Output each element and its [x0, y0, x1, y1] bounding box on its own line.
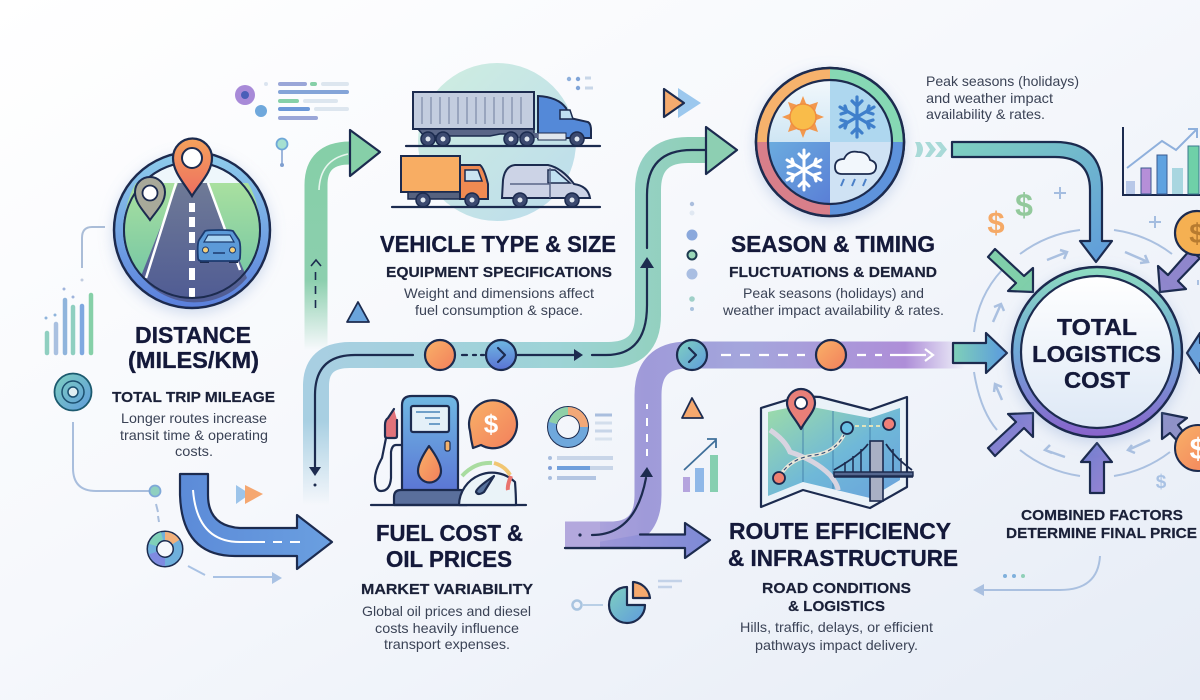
icon: white van [392, 165, 600, 207]
heading: distance: (MILES/KM) [128, 347, 259, 373]
icon: orange box truck [401, 156, 488, 207]
text: fuel description: costs heavily influence [375, 620, 519, 636]
flow: green arrow to vehicle [311, 130, 380, 352]
text: route description [740, 619, 933, 653]
icon: pie chart [572, 581, 682, 623]
icon: season badge [756, 68, 904, 216]
icon: double play top [664, 88, 701, 118]
icon: fuel-side donut and lists [548, 411, 613, 480]
panel: vehicle type [380, 63, 616, 318]
panel: distance [112, 138, 332, 569]
icon: blue triangle [347, 302, 369, 322]
icon: main pin [173, 138, 212, 196]
text: vehicle description: Weight and dimensions affect [404, 285, 594, 301]
panel: season [722, 68, 1112, 318]
subheading: road conditions: ROAD CONDITIONS [762, 580, 911, 597]
arrow: green into total [988, 249, 1033, 292]
text: distance description: Longer routes increase [121, 410, 267, 426]
icon: sun [782, 96, 824, 138]
icon: return arrow [973, 556, 1100, 596]
icon: green dollar: $ [1015, 187, 1033, 223]
icon: white snowflake [787, 150, 821, 190]
flow: teal road from distance to season [309, 127, 737, 505]
arrow: distance to fuel [180, 474, 332, 569]
arrow: season to total [915, 142, 1112, 262]
subheading: road conditions: & LOGISTICS [788, 598, 885, 615]
icon: connector bracket [82, 227, 105, 268]
subheading: total trip mileage: TOTAL TRIP MILEAGE [112, 389, 275, 406]
icon: blue snowflake [840, 97, 874, 137]
chart: left mini bars [44, 278, 91, 353]
icon: car [198, 230, 240, 263]
circle: total [1012, 267, 1182, 437]
heading: distance [128, 322, 259, 373]
heading: fuel: FUEL COST & [376, 520, 523, 546]
arrow: upper-right into total [1158, 250, 1200, 292]
subheading: fluctuations: FLUCTUATIONS & DEMAND [729, 264, 937, 281]
icon: bridge [834, 441, 913, 501]
arrow: bottom into total [1081, 443, 1112, 493]
icon: fuel pump [371, 396, 526, 505]
arrow: left into total [953, 333, 1007, 373]
heading: fuel [376, 520, 523, 572]
icon: route map [761, 389, 913, 508]
icon: dashed curve arrow [188, 566, 282, 584]
subheading: equipment: EQUIPMENT SPECIFICATIONS [386, 264, 612, 281]
heading: season: SEASON & TIMING [731, 231, 935, 257]
heading: fuel: OIL PRICES [386, 546, 512, 572]
panel: fuel [361, 396, 533, 652]
heading: total: TOTAL [1057, 314, 1137, 340]
icon: plus marks [1054, 187, 1161, 228]
text: season side note: availability & rates. [926, 106, 1045, 122]
heading: vehicle: VEHICLE TYPE & SIZE [380, 231, 616, 257]
text: season description: weather impact availability & rates. [722, 302, 944, 318]
icon: small donut [152, 536, 178, 562]
heading: total: LOGISTICS [1032, 341, 1161, 367]
text: vehicle description [404, 285, 594, 318]
icon: dollar bubble: $ [484, 409, 499, 439]
caption: combined factors: COMBINED FACTORS [1021, 507, 1183, 524]
icon: top coin [1175, 211, 1200, 255]
icon: road badge [114, 138, 270, 308]
icon: gauge [459, 463, 516, 505]
text: season side note: Peak seasons (holidays) [926, 73, 1079, 89]
text: vehicle description: fuel consumption & space. [415, 302, 583, 318]
arrow: lower-left into total [988, 413, 1033, 456]
icon: double play small [236, 485, 263, 504]
text: distance description [120, 410, 268, 459]
arrow: right into total [1187, 333, 1200, 373]
heading: route [728, 518, 958, 571]
text: season description [722, 285, 944, 318]
text: season description: Peak seasons (holidays) and [743, 285, 924, 301]
caption: combined factors: DETERMINE FINAL PRICE [1006, 525, 1197, 542]
icon: semi truck [406, 92, 600, 146]
text: route description: Hills, traffic, delays, or efficient [740, 619, 933, 635]
text: season side note: and weather impact [926, 90, 1053, 106]
panel: total logistics cost [953, 187, 1200, 596]
orbit of dashed arcs [974, 230, 1198, 476]
heading: distance: DISTANCE [135, 322, 251, 348]
panel: route [728, 389, 958, 653]
heading: total [1032, 314, 1161, 393]
heading: route: & INFRASTRUCTURE [728, 545, 958, 571]
text: distance description: costs. [175, 443, 213, 459]
icon: orange triangle [682, 398, 703, 418]
subheading: market: MARKET VARIABILITY [361, 581, 533, 598]
chart: mini rising bars [683, 439, 718, 492]
icon: small pin [135, 177, 165, 220]
icon: vehicle backdrop circle [418, 63, 576, 221]
icon: top lines with dots [235, 82, 347, 118]
chart: top right bars [1123, 127, 1200, 195]
icon: rain cloud [835, 152, 876, 186]
text: fuel description: transport expenses. [384, 636, 510, 652]
icon: vertical dots [686, 202, 698, 311]
text: season side note [926, 73, 1079, 122]
text: distance description: transit time & operating [120, 427, 268, 443]
icon: bottom coin [1175, 425, 1200, 471]
caption: combined factors [1006, 507, 1197, 542]
text: fuel description: Global oil prices and diesel [362, 603, 531, 619]
arrow: lower-right into total [1162, 413, 1188, 446]
subheading: road conditions [762, 580, 911, 615]
icon: map pin [787, 389, 815, 429]
text: fuel description [362, 603, 531, 652]
icon: dollar bubble [469, 400, 517, 448]
icon: orange dollar: $ [987, 205, 1005, 240]
icon: small dollar: $ [1156, 472, 1167, 493]
flow: purple road from fuel to total [565, 340, 965, 558]
icon: connector line [73, 422, 160, 522]
text: route description: pathways impact delivery. [755, 637, 918, 653]
icon: small lollipop marker [276, 138, 288, 167]
icon: target [54, 374, 92, 410]
icon: dots top of vehicle [567, 77, 593, 90]
heading: route: ROUTE EFFICIENCY [729, 518, 951, 544]
heading: total: COST [1064, 367, 1131, 393]
